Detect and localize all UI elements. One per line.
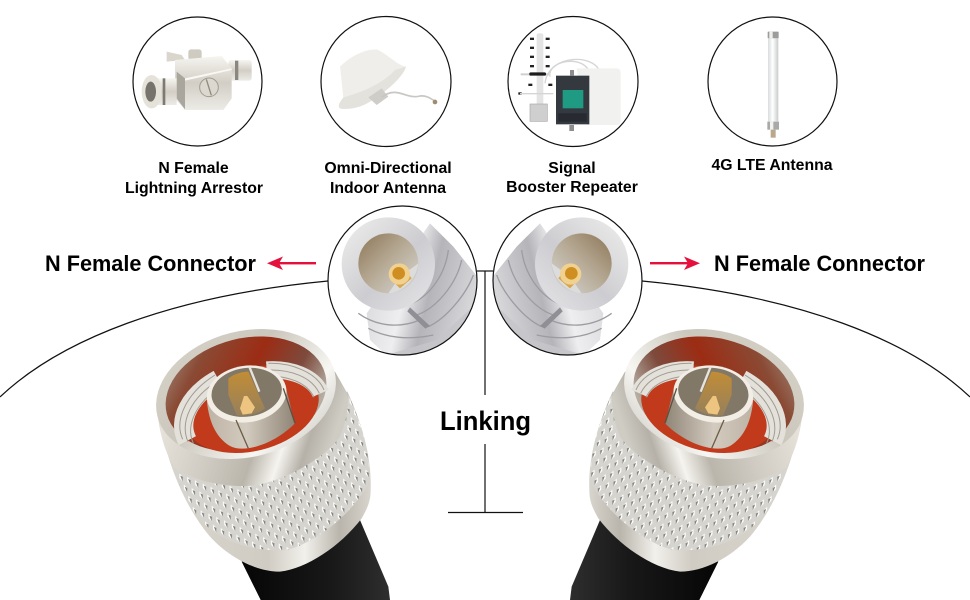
right cable — [570, 520, 718, 600]
right inner cavity wall — [621, 320, 807, 468]
right outer ring — [610, 311, 818, 477]
left outer ring — [142, 311, 350, 477]
linking bracket lines — [448, 271, 523, 512]
left cavity floor — [175, 352, 328, 466]
left connector label: N Female Connector — [45, 251, 256, 276]
left N male plug — [142, 311, 390, 600]
label: signal booster — [506, 160, 638, 196]
label: indoor antenna — [324, 160, 452, 197]
product circle: lightning arrestor — [133, 17, 262, 146]
left knurled grip — [173, 395, 369, 550]
left threads — [180, 363, 324, 443]
product circle: 4G LTE antenna — [708, 17, 837, 146]
label: lightning arrestor — [125, 160, 263, 197]
right arc line — [642, 281, 970, 397]
right threads — [636, 363, 780, 443]
label: lightning arrestor: Lightning Arrestor — [125, 180, 263, 197]
left front band — [157, 372, 348, 486]
linking label: Linking — [440, 406, 531, 436]
left red arrow — [267, 256, 316, 270]
left rear collar — [165, 392, 371, 572]
right red arrow — [650, 256, 700, 270]
right front band — [612, 372, 803, 486]
right connector label: N Female Connector — [714, 251, 925, 276]
left centre pin — [207, 383, 295, 449]
right N male plug — [570, 311, 818, 600]
label: indoor antenna: Indoor Antenna — [330, 180, 446, 197]
callout circle: right N female connector — [490, 206, 642, 360]
right knurled grip — [591, 395, 787, 550]
right cavity floor — [632, 352, 785, 466]
left inner cavity wall — [153, 320, 339, 468]
label: lightning arrestor: N Female — [158, 160, 229, 177]
label: signal booster: Booster Repeater — [506, 179, 638, 196]
product circle: indoor antenna — [321, 16, 451, 146]
label: 4G LTE antenna: 4G LTE Antenna — [711, 157, 833, 174]
label: indoor antenna: Omni-Directional — [324, 160, 452, 177]
right rear collar — [589, 392, 795, 572]
label: signal booster: Signal — [548, 160, 596, 177]
left cable — [242, 520, 390, 600]
left arc line — [0, 281, 328, 397]
product circle: signal booster repeater — [508, 16, 638, 146]
callout circle: left N female connector — [328, 206, 480, 360]
right centre pin — [665, 383, 753, 449]
